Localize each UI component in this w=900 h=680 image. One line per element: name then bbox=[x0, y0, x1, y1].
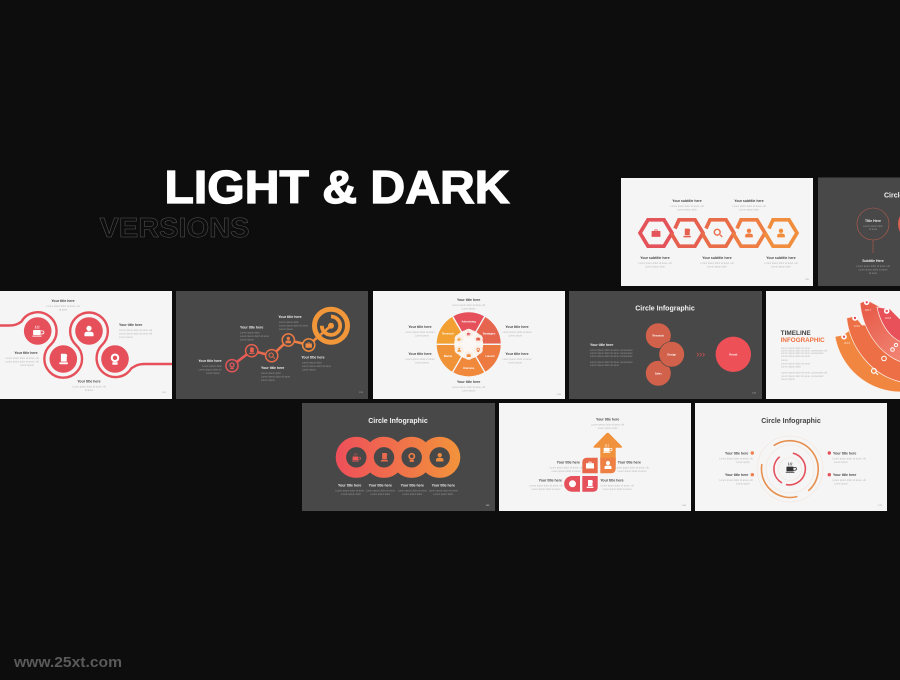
wheel segments bbox=[436, 312, 501, 377]
subtitle: VERSIONS outline: VERSIONS bbox=[100, 212, 250, 243]
hexagon labels bbox=[638, 199, 798, 268]
hexagon labels: Lorem ipsum dolor sit amet, elit bbox=[700, 262, 734, 265]
labels: Lorem ipsum dolor sit amet, elit bbox=[119, 332, 153, 336]
panel: light concentric rings slide: 137 bbox=[878, 505, 883, 507]
labels: Lorem ipsum dolor sit bbox=[199, 368, 222, 372]
panel: light timeline arcs slide bbox=[766, 291, 900, 399]
labels: Your title here bbox=[51, 299, 75, 303]
hexagon labels: Your subtitle here bbox=[702, 256, 732, 260]
year labels: 2015 bbox=[844, 341, 851, 345]
year labels: 2017 bbox=[865, 308, 872, 312]
panel: light wheel slide bbox=[373, 291, 565, 399]
wheel hub bbox=[454, 329, 483, 360]
labels: Your title here bbox=[119, 323, 142, 327]
labels bbox=[335, 484, 458, 496]
labels: Lorem ipsum bbox=[302, 368, 316, 372]
hexagon chain bbox=[640, 220, 797, 246]
labels: Your title here bbox=[338, 484, 361, 488]
labels: Lorem ipsum dolor sit amet bbox=[406, 331, 435, 334]
text block: Lorem ipsum dolor sit amet bbox=[590, 364, 619, 367]
heading: INFOGRAPHIC bbox=[781, 337, 825, 344]
circle labels: Sales bbox=[655, 371, 662, 375]
panel: dark chain rings slide: 135 bbox=[486, 505, 490, 507]
arc icons bbox=[871, 343, 898, 375]
segment labels: Strategies bbox=[483, 332, 496, 336]
labels: Lorem ipsum dolor sit amet bbox=[503, 331, 532, 334]
labels: Your title here bbox=[77, 380, 101, 384]
hexagon labels: Your subtitle here bbox=[672, 199, 702, 203]
labels: Lorem ipsum dolor sit amet, elit bbox=[549, 466, 583, 470]
labels: Lorem ipsum dolor sit amet, elit bbox=[119, 329, 153, 332]
hexagon labels: Lorem ipsum dolor bbox=[739, 208, 759, 212]
watermark: www.25xt.com bbox=[13, 654, 122, 671]
panel: light arrow blocks slide: 136 bbox=[682, 505, 687, 507]
panel: light hexagon chain slide bbox=[621, 178, 813, 286]
circle labels: Design bbox=[667, 352, 676, 356]
hexagon labels: Your subtitle here bbox=[734, 199, 764, 203]
concentric rings bbox=[757, 436, 823, 502]
hub icons bbox=[457, 331, 480, 357]
labels: Your title here bbox=[725, 452, 748, 456]
subtitle block: Subtitle Here bbox=[862, 259, 884, 263]
labels: Lorem ipsum dolor sit amet, elit bbox=[452, 304, 486, 307]
labels: Lorem ipsum dolor bbox=[240, 332, 260, 334]
labels: Lorem ipsum bbox=[261, 379, 275, 382]
heading bbox=[781, 330, 825, 344]
labels: Lorem ipsum dolor sit amet bbox=[618, 470, 647, 473]
labels: Your title here bbox=[301, 356, 325, 360]
node icons bbox=[32, 326, 119, 365]
target bbox=[314, 309, 348, 342]
text block bbox=[590, 343, 633, 367]
labels: Your title here bbox=[14, 351, 38, 355]
text block: Lorem ipsum dolor sit amet, consectetur bbox=[781, 352, 824, 355]
chevrons: ››› bbox=[696, 349, 705, 359]
hexagon labels: Lorem ipsum dolor sit amet, elit bbox=[764, 262, 798, 265]
labels: Lorem ipsum dolor sit amet, elit bbox=[46, 305, 80, 308]
labels: Lorem ipsum bbox=[20, 364, 34, 367]
segment labels bbox=[442, 320, 496, 370]
panel: dark staircase target slide: 132 bbox=[359, 392, 364, 394]
labels: Lorem ipsum dolor bbox=[598, 427, 618, 430]
text block bbox=[781, 347, 828, 381]
step nodes bbox=[226, 334, 315, 372]
labels: Lorem ipsum dolor sit amet bbox=[335, 490, 364, 492]
hexagon labels: Lorem ipsum dolor bbox=[677, 208, 697, 212]
center cup icon bbox=[786, 463, 796, 473]
labels: Lorem ipsum dolor sit amet, elit bbox=[832, 479, 866, 482]
labels: Lorem ipsum dolor sit amet bbox=[552, 470, 581, 473]
hexagon labels: Lorem ipsum dolor sit amet, elit bbox=[732, 205, 766, 208]
labels: Lorem ipsum bbox=[736, 461, 750, 464]
ring icons bbox=[352, 453, 443, 462]
heading: TIMELINE bbox=[781, 330, 811, 337]
hexagon labels: Lorem ipsum dolor sit amet, elit bbox=[670, 205, 704, 208]
labels: Lorem ipsum dolor sit amet, elit bbox=[719, 458, 753, 460]
labels: Lorem ipsum dolor sit amet, elit bbox=[591, 424, 625, 426]
text block: Lorem ipsum dolor sit amet bbox=[781, 355, 810, 358]
labels: Lorem ipsum dolor bbox=[370, 493, 390, 496]
labels: Lorem ipsum dolor sit amet bbox=[532, 488, 561, 491]
labels bbox=[529, 418, 649, 491]
segment labels: Launch bbox=[485, 354, 495, 358]
labels: Lorem ipsum bbox=[736, 482, 750, 486]
labels: sit amet bbox=[59, 308, 68, 312]
text block: Lorem ipsum bbox=[781, 378, 795, 381]
panel: light winding path slide bbox=[0, 291, 172, 399]
labels: Lorem ipsum dolor sit amet bbox=[302, 365, 331, 368]
ring with title: Title Here bbox=[865, 219, 881, 223]
panel: light arrow blocks slide bbox=[499, 403, 691, 511]
ring with title bbox=[857, 208, 889, 253]
hexagon labels: Your subtitle here bbox=[640, 256, 670, 260]
labels: Your title here bbox=[401, 484, 424, 488]
tile icons bbox=[569, 444, 612, 488]
labels: Your title here bbox=[369, 484, 392, 488]
labels bbox=[719, 452, 866, 486]
labels: Your title here bbox=[408, 352, 432, 356]
panel: light wheel slide: 133 bbox=[557, 394, 562, 396]
labels bbox=[5, 299, 153, 392]
result circle bbox=[716, 337, 751, 372]
labels: Lorem ipsum dolor sit amet, elit bbox=[529, 484, 563, 488]
labels: Your title here bbox=[600, 478, 624, 482]
labels: Your title here bbox=[408, 325, 432, 329]
labels: Your title here bbox=[457, 380, 480, 384]
year labels: 2016 bbox=[854, 324, 860, 328]
text block: Lorem ipsum dolor bbox=[781, 366, 801, 368]
labels: Your title here bbox=[725, 473, 748, 477]
hexagon labels: Lorem ipsum dolor sit amet, elit bbox=[638, 262, 672, 265]
panel: dark circle slide cropped bbox=[818, 178, 900, 286]
panel: dark circle flow slide: 134 bbox=[752, 392, 757, 394]
circle labels: Research bbox=[652, 334, 665, 338]
labels: Your title here bbox=[505, 325, 529, 329]
labels: Your title here bbox=[539, 478, 562, 482]
year labels bbox=[844, 308, 892, 345]
text block: Lorem ipsum dolor sit amet, consectetur bbox=[781, 375, 824, 378]
labels: Lorem ipsum dolor sit amet, elit bbox=[452, 386, 486, 389]
labels: Lorem ipsum dolor sit amet, elit bbox=[615, 466, 649, 470]
circle nodes bbox=[24, 317, 129, 373]
labels: Your title here bbox=[618, 460, 641, 464]
panel: light hexagon chain slide: 135 bbox=[805, 279, 810, 281]
heading: Circle Infographic bbox=[368, 418, 428, 425]
winding line bbox=[0, 312, 172, 378]
subtitle block bbox=[856, 259, 890, 275]
hexagon labels: Lorem ipsum dolor bbox=[771, 266, 791, 268]
heading: Circle Infographic bbox=[761, 418, 821, 425]
panel: light concentric rings slide bbox=[695, 403, 887, 511]
text block: Lorem ipsum dolor sit amet bbox=[781, 362, 810, 366]
chain rings bbox=[336, 437, 460, 478]
segment labels: Advertising bbox=[462, 320, 476, 324]
labels: Lorem ipsum bbox=[415, 362, 429, 364]
labels: Your title here bbox=[596, 418, 619, 422]
panel: dark staircase target slide bbox=[176, 291, 368, 399]
hexagon labels: Your subtitle here bbox=[766, 256, 796, 260]
hexagon icons bbox=[652, 229, 785, 238]
labels: Lorem ipsum bbox=[834, 461, 848, 464]
segment labels: Market bbox=[444, 354, 452, 358]
text block: Lorem ipsum dolor sit amet, consectetur bbox=[590, 352, 633, 355]
labels: Your title here bbox=[261, 366, 284, 370]
labels: Lorem ipsum dolor bbox=[433, 493, 453, 496]
circle labels bbox=[652, 334, 737, 375]
labels: sit amet bbox=[85, 389, 94, 392]
labels: Lorem ipsum dolor bbox=[402, 493, 422, 496]
text block: Lorem ipsum dolor sit amet, consectetur bbox=[590, 361, 633, 364]
text block: Lorem ipsum dolor sit amet bbox=[781, 347, 810, 350]
panel: dark chain rings slide bbox=[302, 403, 495, 511]
labels: Your title here bbox=[432, 484, 455, 488]
labels: Lorem ipsum dolor sit amet, elit bbox=[600, 484, 634, 488]
panel: dark circle flow slide bbox=[569, 291, 762, 399]
heading: Circle Infographic bbox=[635, 306, 695, 312]
labels: Lorem ipsum bbox=[415, 334, 429, 338]
labels: Lorem ipsum dolor bbox=[261, 372, 281, 375]
labels: Lorem ipsum bbox=[508, 334, 522, 338]
labels: Your title here bbox=[833, 473, 856, 477]
filled circle bbox=[898, 208, 900, 240]
hexagon labels: Lorem ipsum dolor bbox=[645, 266, 665, 268]
subtitle block: sit amet bbox=[869, 272, 878, 275]
labels: Lorem ipsum dolor sit amet, elit bbox=[719, 479, 753, 482]
labels: Lorem ipsum bbox=[119, 336, 133, 339]
text block: Lorem ipsum dolor sit amet, consectetur bbox=[590, 349, 633, 352]
labels: Lorem ipsum dolor sit amet bbox=[240, 335, 269, 338]
labels: Lorem ipsum dolor sit amet bbox=[261, 376, 290, 378]
square tiles bbox=[564, 458, 616, 492]
labels: Lorem ipsum dolor sit amet bbox=[603, 488, 632, 491]
ring with title: Lorem ipsum dolor bbox=[863, 225, 883, 228]
arrow tile bbox=[593, 433, 622, 465]
labels: Lorem ipsum bbox=[462, 308, 476, 310]
panel: light winding path slide: 131 bbox=[162, 392, 167, 394]
labels: Lorem ipsum dolor bbox=[279, 321, 299, 324]
segment labels: Outcome bbox=[463, 366, 475, 370]
labels: Lorem ipsum dolor sit amet, elit bbox=[5, 360, 39, 364]
labels: Lorem ipsum bbox=[240, 338, 254, 342]
input circles bbox=[646, 323, 684, 386]
circle labels: Result bbox=[729, 352, 737, 356]
connecting line bbox=[232, 326, 331, 366]
labels bbox=[406, 298, 532, 392]
labels: Lorem ipsum dolor sit amet bbox=[279, 324, 308, 328]
text block: Lorem bbox=[781, 359, 788, 362]
text block: Lorem ipsum dolor sit amet, consectetur elit bbox=[781, 350, 828, 352]
labels bbox=[198, 315, 331, 382]
segment labels: Research bbox=[442, 332, 454, 336]
labels: Lorem ipsum dolor sit amet bbox=[406, 358, 435, 361]
labels: Lorem ipsum dolor bbox=[341, 493, 361, 496]
labels: Your title here bbox=[557, 460, 580, 464]
labels: Lorem ipsum dolor sit amet, elit bbox=[832, 458, 866, 460]
ring with title: sit amet bbox=[869, 228, 878, 231]
labels: Lorem ipsum bbox=[279, 328, 293, 331]
text block: Lorem ipsum dolor sit amet, consectetur bbox=[590, 355, 633, 358]
labels: Lorem ipsum bbox=[206, 372, 220, 375]
labels: Lorem ipsum dolor sit amet bbox=[398, 490, 427, 492]
labels: Lorem ipsum bbox=[462, 390, 476, 392]
labels: Lorem ipsum dolor sit amet bbox=[503, 358, 532, 361]
text block: Lorem ipsum dolor sit amet, consectetur elit bbox=[781, 372, 828, 374]
year labels: 2018 bbox=[885, 316, 892, 320]
bullets bbox=[751, 451, 831, 476]
subtitle block: Lorem ipsum dolor sit amet bbox=[859, 268, 888, 272]
hexagon labels: Lorem ipsum dolor bbox=[707, 266, 727, 268]
labels: Your title here bbox=[833, 452, 856, 456]
labels: Lorem ipsum dolor sit amet, elit bbox=[72, 386, 106, 388]
labels: Your title here bbox=[457, 298, 480, 302]
labels: Lorem ipsum dolor sit amet bbox=[429, 490, 458, 492]
labels: Lorem ipsum dolor bbox=[302, 362, 322, 364]
labels: Your title here bbox=[278, 315, 302, 319]
labels: Lorem ipsum dolor sit amet, elit bbox=[5, 357, 39, 360]
subtitle block: Lorem ipsum dolor sit amet, elit bbox=[856, 265, 890, 268]
arc bands bbox=[835, 300, 900, 392]
arc markers bbox=[841, 300, 890, 340]
labels: Lorem ipsum bbox=[834, 482, 848, 486]
node icons bbox=[229, 337, 312, 369]
text block: Your title here bbox=[590, 343, 613, 347]
labels: Lorem ipsum dolor bbox=[202, 365, 222, 368]
labels: Lorem ipsum dolor sit amet bbox=[366, 490, 395, 492]
labels: Your title here bbox=[505, 352, 529, 356]
title: LIGHT & DARK: LIGHT & DARK bbox=[164, 161, 510, 213]
labels: Your title here bbox=[198, 359, 222, 363]
labels: Your title here bbox=[240, 326, 263, 330]
labels: Lorem ipsum bbox=[508, 362, 522, 364]
